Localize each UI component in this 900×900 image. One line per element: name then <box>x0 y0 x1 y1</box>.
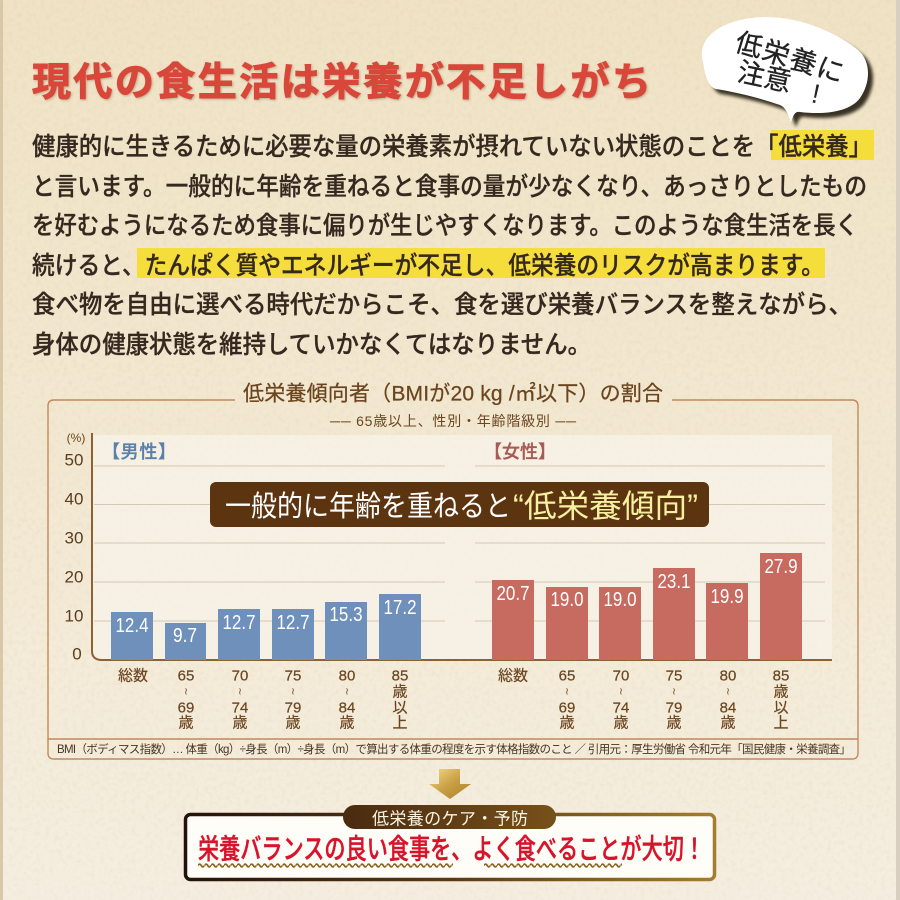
male x labels: 歳 <box>339 714 355 732</box>
male x labels: 歳 <box>392 684 408 700</box>
male bars: 12.7 <box>222 612 256 634</box>
body text: 続けると、たんぱく質やエネルギーが不足し、低栄養のリスクが高まります。 <box>32 252 824 280</box>
female x labels: 歳 <box>720 714 736 732</box>
male x labels: 75 <box>285 668 301 684</box>
female x labels: ≀ <box>672 686 676 698</box>
heading: female: 【女性】 <box>484 442 556 462</box>
body text: 食べ物を自由に選べる時代だからこそ、食を選び栄養バランスを整えながら、 <box>32 291 852 319</box>
chart subtitle: ── 65歳以上、性別・年齢階級別 ── <box>329 413 576 429</box>
title: 現代の食生活は栄養が不足しがち <box>32 62 651 104</box>
female x labels: 74 <box>613 700 629 716</box>
female x labels: 85 <box>773 668 789 684</box>
body text <box>32 133 872 359</box>
male x labels: 65 <box>178 668 194 684</box>
male x labels: 84 <box>339 700 355 716</box>
male bars <box>111 594 421 660</box>
male x labels: 79 <box>285 700 301 716</box>
pill heading <box>343 805 556 829</box>
body text: 身体の健康状態を維持していかなくてはなりません。 <box>32 331 591 359</box>
y axis labels: 0 <box>72 644 82 664</box>
wavy underlines <box>198 863 622 868</box>
male x labels: 総数 <box>118 668 148 684</box>
male bars: 12.4 <box>116 615 148 637</box>
grid lines <box>94 466 825 621</box>
speech bubble: 低栄養に注意: ! <box>809 78 823 109</box>
female x labels: ≀ <box>565 686 569 698</box>
female x labels: 69 <box>559 700 575 716</box>
female bars: 20.7 <box>496 583 530 605</box>
male x labels: ≀ <box>184 686 188 698</box>
male x labels: ≀ <box>291 686 295 698</box>
male x labels: ≀ <box>238 686 242 698</box>
male x labels: 歳 <box>232 714 248 732</box>
female x labels: 79 <box>666 700 682 716</box>
speech bubble: 低栄養に注意: 注意 <box>735 57 794 97</box>
female x labels: 80 <box>720 668 736 684</box>
female x labels: 歳 <box>773 684 789 700</box>
female bars: 27.9 <box>764 556 798 578</box>
male x labels: 上 <box>392 714 408 732</box>
callout banner <box>210 482 709 527</box>
female x labels: 上 <box>773 714 789 732</box>
male x labels: 85 <box>392 668 408 684</box>
speech bubble: 低栄養に注意: 低栄養に <box>732 27 848 89</box>
female bars: 23.1 <box>658 571 690 593</box>
female x labels: 以 <box>773 700 789 716</box>
female x labels: ≀ <box>619 686 623 698</box>
female x labels: 75 <box>666 668 682 684</box>
y axis labels: (%) <box>67 431 85 445</box>
male x labels <box>118 668 408 732</box>
plot background <box>92 435 832 660</box>
female x labels: ≀ <box>726 686 730 698</box>
y axis labels <box>65 431 85 664</box>
female x labels: 65 <box>559 668 575 684</box>
male x labels: ≀ <box>345 686 349 698</box>
male x labels: 69 <box>178 700 194 716</box>
male x labels: 74 <box>232 700 248 716</box>
female x labels: 歳 <box>559 714 575 732</box>
panel: malnutrition ratio chart <box>48 382 858 759</box>
callout banner: 一般的に年齢を重ねると <box>225 490 511 523</box>
female bars: 19.0 <box>550 589 584 611</box>
highlight: 低栄養 <box>771 130 874 160</box>
y axis labels: 50 <box>65 450 83 470</box>
y axis labels: 40 <box>65 490 83 508</box>
speech bubble: 低栄養に注意 <box>702 17 873 127</box>
male x labels: 80 <box>339 668 355 684</box>
female x labels: 歳 <box>613 714 629 732</box>
y axis labels: 10 <box>65 606 83 626</box>
female x labels <box>498 668 789 732</box>
female x labels: 84 <box>720 700 736 716</box>
axes <box>92 433 832 660</box>
arrow <box>429 769 471 799</box>
male bars: 17.2 <box>384 597 416 619</box>
pill heading: 低栄養のケア・予防 <box>372 810 528 828</box>
female bars <box>492 553 802 660</box>
frame <box>186 814 714 880</box>
male x labels: 歳 <box>285 714 301 732</box>
female x labels: 70 <box>613 668 629 684</box>
female bars: 19.9 <box>710 586 744 608</box>
male bars: 9.7 <box>173 625 197 647</box>
callout banner: “低栄養傾向” <box>513 488 698 524</box>
highlight: risk sentence <box>137 248 825 278</box>
male x labels: 70 <box>232 668 248 684</box>
male bars: 12.7 <box>276 612 310 634</box>
male x labels: 歳 <box>178 714 194 732</box>
male x labels: 以 <box>392 700 408 716</box>
y axis labels: 20 <box>65 568 83 586</box>
female x labels: 歳 <box>666 714 682 732</box>
heading: male: 【男性】 <box>102 442 176 462</box>
y axis labels: 30 <box>65 528 83 548</box>
message: 栄養バランスの良い食事を、よく食べることが大切！ <box>198 834 705 864</box>
footnote: BMI（ボディマス指数）… 体重（kg）÷身長（m）÷身長（m）で算出する体重の程度を示す体格指数のこと ／ 引用元：厚生労働省 令和元年「国民健康・栄養調査」 <box>57 742 851 756</box>
panel frame <box>48 400 858 759</box>
chart title: 低栄養傾向者（BMIが20 kg /㎡以下）の割合 <box>243 382 663 406</box>
panel: care and prevention <box>186 805 714 880</box>
female bars: 19.0 <box>604 589 636 611</box>
male bars: 15.3 <box>330 604 362 626</box>
female x labels: 総数 <box>498 668 528 684</box>
